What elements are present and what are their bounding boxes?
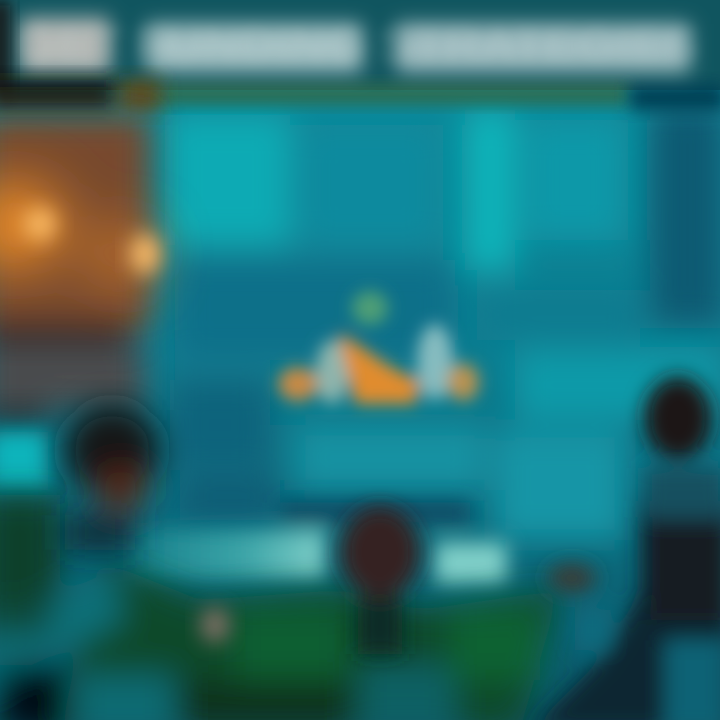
left dark edge: [0, 0, 10, 100]
icon: right lamp glow: [130, 234, 160, 274]
small hand highlight: [200, 607, 230, 643]
title: blurred heading: GET FUNDING STRATEGIES: [18, 18, 698, 70]
screen panels: blurred teal columns: [165, 105, 720, 540]
left cyan patch: [0, 432, 48, 490]
panel: warm lit wall on the left: [0, 115, 160, 429]
person: left audience head: [64, 404, 160, 550]
chart: blurred mountain-shaped bars: [278, 291, 479, 404]
dark band above lamp area: [0, 80, 160, 110]
person: right figure in dark jacket: [530, 376, 720, 720]
title band: dark teal strip: [0, 0, 720, 110]
icon: left lamp glow: [23, 207, 57, 241]
person: centre audience head: [340, 506, 420, 654]
foreground: green audience silhouettes: [0, 495, 560, 720]
light horizontal streak behind the heads: [130, 502, 507, 584]
